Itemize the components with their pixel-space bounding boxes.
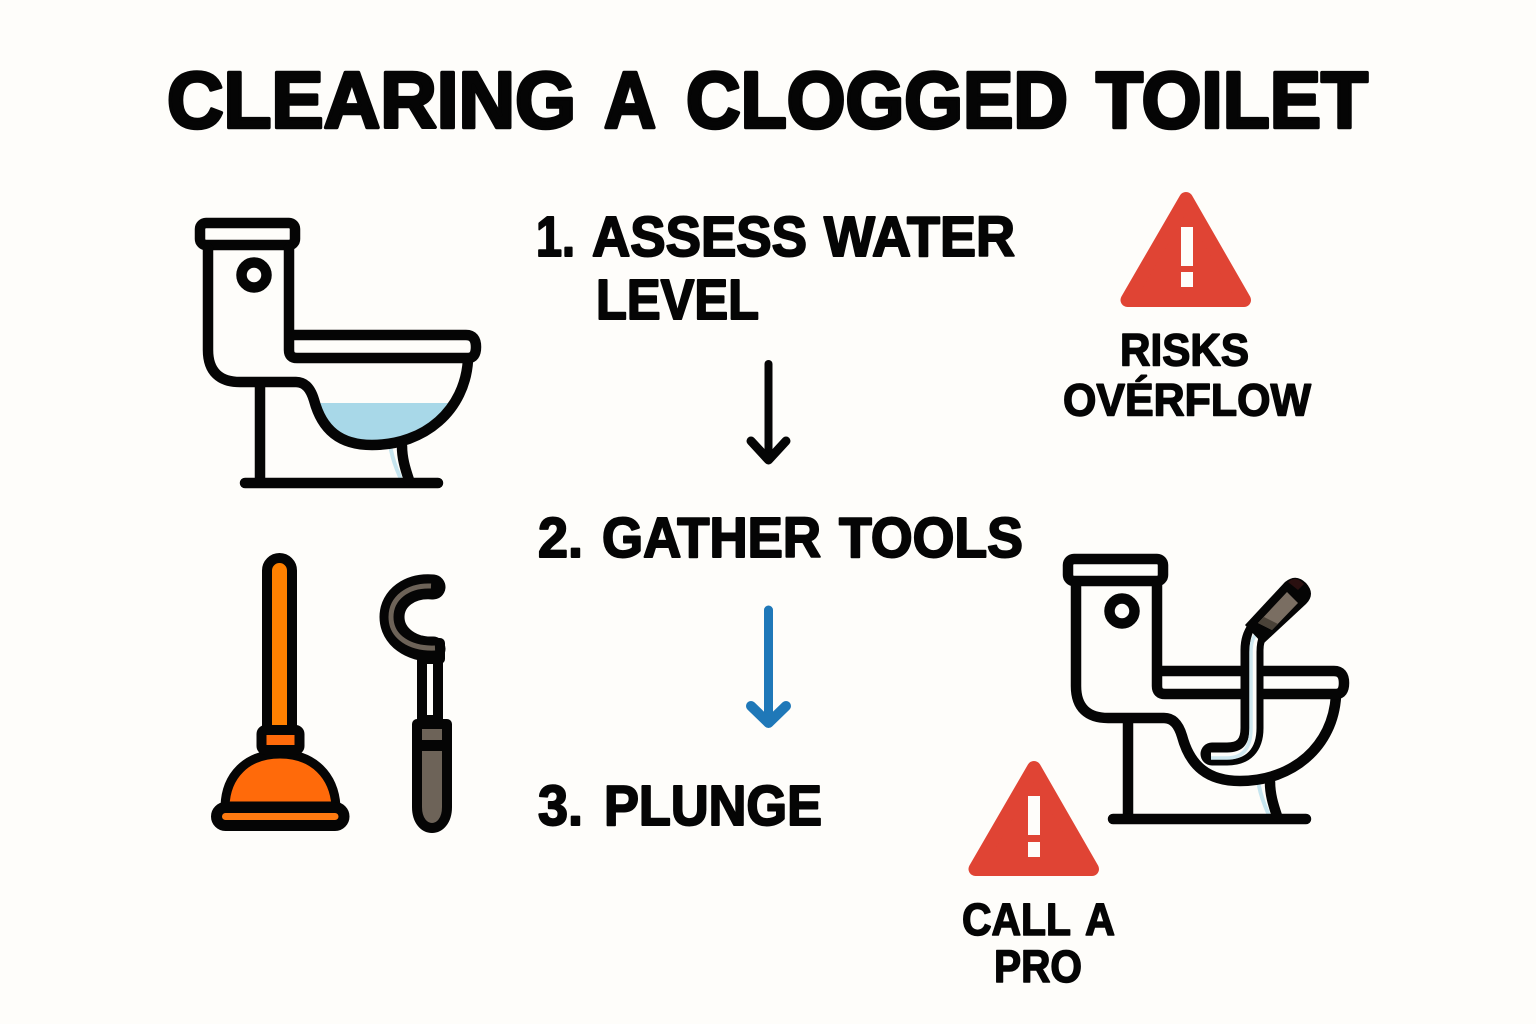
step 3 heading: PLUNGE (604, 774, 822, 838)
plunger collar (262, 730, 300, 750)
step 1 heading: ASSESS (592, 205, 807, 269)
tank lid (1068, 559, 1163, 581)
step 2 heading: GATHER (602, 506, 821, 570)
water in bowl (316, 403, 449, 445)
rear foot (1270, 782, 1277, 816)
title: CLOGGED (686, 56, 1068, 144)
warning triangle (976, 768, 1092, 869)
arrow: blue down (751, 610, 786, 723)
water trace at foot (391, 450, 400, 477)
call a pro label: PRO (994, 941, 1082, 992)
call a pro label: CALL (962, 894, 1071, 945)
pedestal (1123, 720, 1133, 818)
auger neck (417, 638, 445, 664)
step 2 heading (538, 506, 1023, 570)
auger handle (1245, 578, 1311, 644)
plunger handle (267, 558, 292, 748)
auger cable tint (1211, 634, 1256, 758)
auger handle base (1258, 617, 1278, 630)
step 2 heading: TOOLS (839, 506, 1023, 570)
risks label: OVÉRFLOW (1063, 374, 1311, 426)
arrow: black down (751, 364, 786, 460)
title (167, 56, 1368, 144)
base line (1113, 814, 1306, 824)
auger grip band (417, 740, 447, 751)
tank and bowl outline (1076, 584, 1336, 781)
step 1 heading: LEVEL (596, 268, 759, 332)
pedestal (255, 384, 265, 482)
tank right side and seat (1157, 584, 1344, 694)
step 2 heading: 2. (538, 506, 583, 570)
step 3 heading: 3. (538, 774, 583, 838)
auger cable inner (1211, 632, 1257, 756)
warning: call a pro (962, 768, 1115, 992)
auger grip (417, 724, 447, 828)
flush button (1110, 598, 1134, 624)
call a pro label (962, 894, 1115, 992)
exclamation mark (1181, 227, 1193, 287)
title: TOILET (1096, 56, 1368, 144)
risks label (1063, 324, 1311, 426)
risks label: RISKS (1120, 324, 1249, 376)
step 1 heading: 1. (536, 205, 575, 269)
toilet outline (1068, 559, 1344, 819)
rear foot (402, 446, 409, 480)
base line (245, 478, 438, 488)
water trace at foot (1259, 786, 1268, 813)
auger handle tip (1288, 579, 1304, 590)
plunger dome (225, 754, 336, 806)
auger cable outline (1212, 630, 1258, 754)
warning triangle (1128, 199, 1244, 300)
auger shaft (422, 659, 438, 720)
auger hook highlight (391, 586, 435, 648)
icon: toilet auger (391, 586, 447, 828)
icon: toilet with water level (200, 223, 476, 483)
title: CLEARING (167, 56, 576, 144)
title: A (604, 56, 656, 144)
tank and bowl outline (208, 248, 468, 445)
icon: plunger (216, 558, 344, 826)
plunger brim (216, 808, 344, 826)
exclamation mark (1028, 796, 1040, 857)
call a pro label: A (1085, 894, 1115, 945)
step 1 heading (536, 205, 1015, 332)
tank right side and seat (289, 248, 476, 358)
flush button (242, 262, 266, 288)
warning: risks overflow (1063, 199, 1311, 426)
icon: toilet with auger (1068, 559, 1344, 819)
auger handle fill (1258, 592, 1298, 630)
step 1 heading: WATER (824, 205, 1015, 269)
tank lid (200, 223, 295, 245)
auger hook (392, 587, 433, 649)
